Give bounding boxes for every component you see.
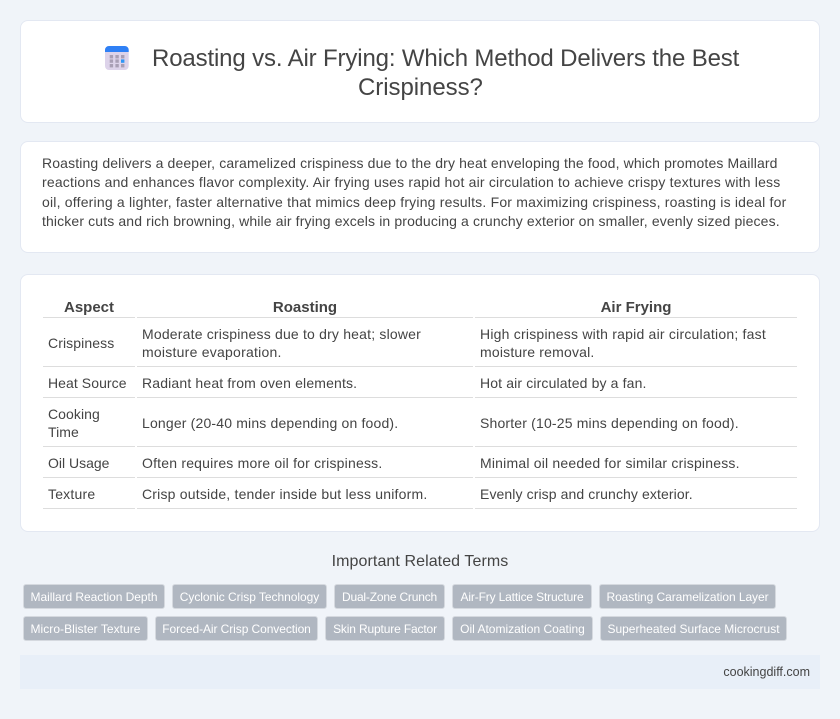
tag: [334, 584, 445, 609]
table row: crispiness: moisture removal.: [480, 344, 594, 360]
table row: crispiness: [48, 326, 766, 360]
table row: texture: Crisp outside, tender inside but less uniform.: [142, 486, 427, 502]
tag: [23, 584, 165, 609]
tag: [155, 616, 318, 641]
text block: intro paragraph: thicker cuts and rich browning, while air frying excels in producing a crunchy exterior on smaller, evenly sized pieces.: [42, 213, 780, 229]
tag: Dual-Zone Crunch: [342, 590, 437, 604]
table row: crispiness: Moderate crispiness due to dry heat; slower: [142, 326, 421, 342]
tag: Cyclonic Crisp Technology: [180, 590, 319, 604]
table row: oil usage: Often requires more oil for crispiness.: [142, 455, 382, 471]
tag: [452, 584, 592, 609]
table header row: Air Frying: [601, 299, 671, 316]
panel: intro text: [20, 141, 820, 253]
tag: Superheated Surface Microcrust: [607, 622, 780, 636]
table header row: Aspect: [64, 299, 114, 316]
panel: title header: Crispiness?: [358, 74, 483, 101]
tag: [172, 584, 327, 609]
tag: [600, 616, 787, 641]
footer source text: cookingdiff.com: [723, 665, 810, 679]
table row: oil usage: Oil Usage: [48, 455, 109, 471]
tag: Forced-Air Crisp Convection: [162, 622, 311, 636]
table row: texture: Texture: [48, 486, 95, 502]
footer: [20, 655, 820, 689]
panel: related term tags: [23, 584, 787, 641]
table header row: [64, 299, 671, 316]
table row: heat source: Hot air circulated by a fan.: [480, 375, 647, 391]
table row: cooking time: Time: [48, 424, 79, 440]
text block: intro paragraph: [42, 155, 786, 229]
icon: calendar: [105, 46, 129, 70]
panel: title header: [20, 20, 820, 123]
tag: Micro-Blister Texture: [30, 622, 140, 636]
table row: cooking time: Cooking: [48, 406, 100, 422]
title: [152, 45, 740, 101]
table row: heat source: [48, 375, 647, 391]
tag: Maillard Reaction Depth: [31, 590, 157, 604]
tag: [325, 616, 445, 641]
table row: oil usage: [48, 455, 740, 471]
tag: Oil Atomization Coating: [460, 622, 585, 636]
table row: heat source: Radiant heat from oven elements.: [142, 375, 357, 391]
table row: cooking time: Shorter (10-25 mins depending on food).: [480, 415, 739, 431]
text block: intro paragraph: oil, offering a lighter, faster alternative that mimics deep frying results. For maximizing crispiness, roasting is ideal for: [42, 194, 786, 210]
table row: cooking time: [48, 406, 739, 440]
table row: oil usage: Minimal oil needed for similar crispiness.: [480, 455, 740, 471]
panel: comparison table: [20, 274, 820, 532]
tag: Air-Fry Lattice Structure: [461, 590, 583, 604]
table row: texture: Evenly crisp and crunchy exterior.: [480, 486, 693, 502]
panel: title header: Roasting vs. Air Frying: Which Method Delivers the Best: [152, 45, 739, 72]
text block: intro paragraph: reactions and enhances flavor complexity. Air frying uses rapid hot air circulation to achieve crispy textures with less: [42, 174, 780, 190]
table row: crispiness: moisture evaporation.: [142, 344, 282, 360]
table header row: Roasting: [273, 299, 337, 316]
table row: texture: [48, 486, 693, 502]
tag: Roasting Caramelization Layer: [606, 590, 769, 604]
tag: [452, 616, 593, 641]
tag: [23, 616, 148, 641]
heading: related terms: Important Related Terms: [332, 553, 508, 570]
tag: Skin Rupture Factor: [333, 622, 437, 636]
tag: [599, 584, 776, 609]
table row: heat source: Heat Source: [48, 375, 127, 391]
table row: crispiness: High crispiness with rapid air circulation; fast: [480, 326, 766, 342]
table row: crispiness: Crispiness: [48, 335, 114, 351]
text block: intro paragraph: Roasting delivers a deeper, caramelized crispiness due to the dry heat enveloping the food, which promotes Maillard: [42, 155, 778, 171]
table row: cooking time: Longer (20-40 mins depending on food).: [142, 415, 398, 431]
